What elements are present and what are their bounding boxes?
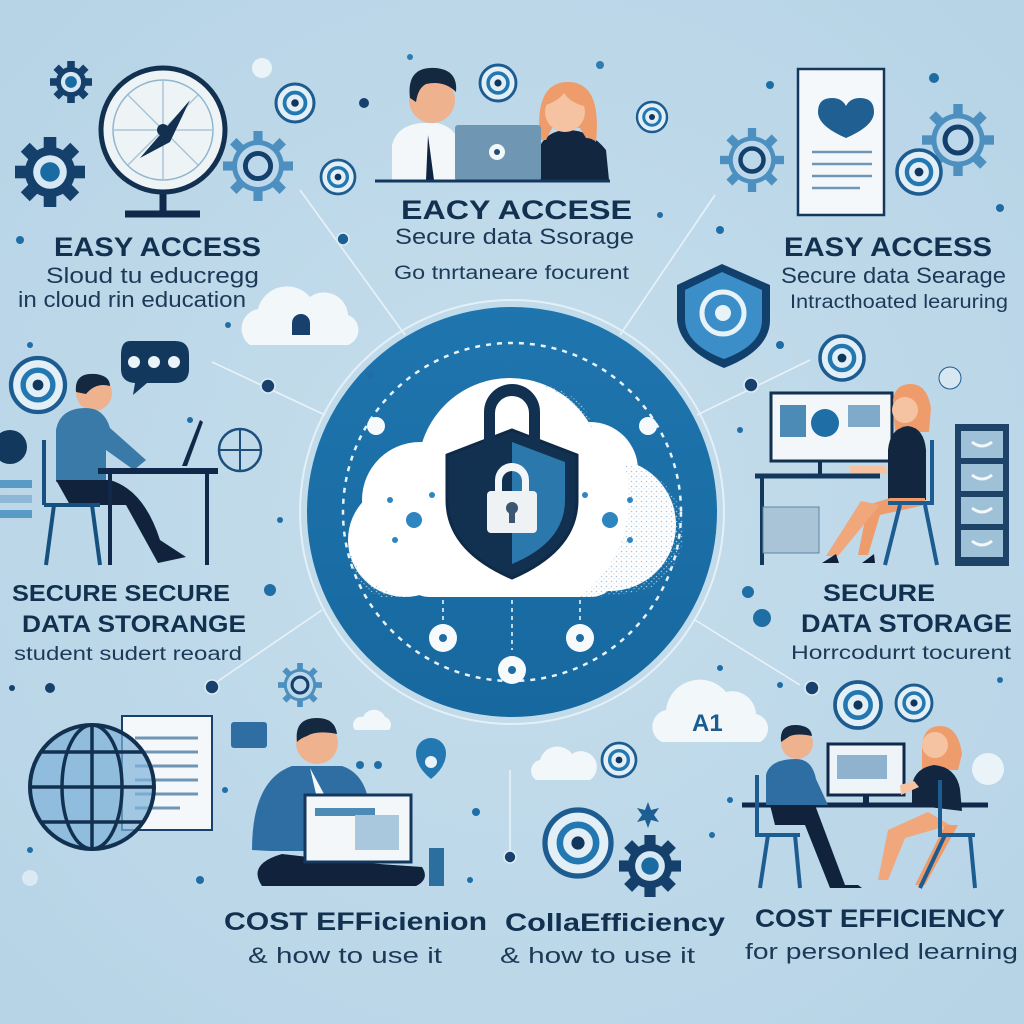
- text: secure data storage right: Horrcodurrt tocurent: [791, 643, 1012, 664]
- illustration: person sitting with laptop: [252, 718, 444, 886]
- text: secure data storage right: DATA STORAGE: [801, 610, 1012, 638]
- monitor: [828, 744, 904, 804]
- text: easy access centre: Secure data Ssorage: [395, 224, 634, 249]
- text: cost efficiency left: [224, 908, 487, 968]
- icon: small badges right: [776, 336, 961, 389]
- text: easy access left: [18, 232, 261, 312]
- icon: cloud with AI label: [652, 680, 768, 742]
- illustration: two people at desk right: [742, 682, 1004, 888]
- icons: top centre: [252, 54, 667, 132]
- text: secure data storage left: [12, 580, 246, 665]
- text: easy access centre: EACY ACCESE: [401, 195, 632, 225]
- text: easy access centre: [394, 195, 634, 284]
- cloud shading: [350, 381, 683, 597]
- text: collaboration efficiency centre: & how to use it: [500, 943, 695, 968]
- base line: [375, 180, 610, 182]
- icon: document top right: [798, 69, 884, 215]
- text: cost efficiency left: & how to use it: [248, 943, 442, 968]
- text: secure data storage right: SECURE: [823, 580, 935, 607]
- man: [757, 725, 862, 888]
- hub connector dots: [367, 417, 657, 684]
- text: cost efficiency right: [745, 905, 1018, 964]
- icon: clock with stand: [101, 68, 225, 214]
- woman: [878, 726, 975, 888]
- text: secure data storage right: [791, 580, 1012, 664]
- illustration: two people with laptop: [375, 68, 610, 181]
- text: easy access right: Intracthoated learuring: [790, 292, 1008, 313]
- speech bubble: [121, 341, 189, 395]
- text: cost efficiency right: COST EFFICIENCY: [755, 905, 1005, 933]
- icon: shield: [677, 264, 770, 368]
- desk and chair: [755, 440, 937, 565]
- icons above: [777, 682, 1004, 785]
- text: collaboration efficiency centre: [500, 909, 725, 968]
- decorative scattered icons: [16, 212, 1003, 884]
- text: collaboration efficiency centre: CollaEfficiency: [505, 909, 725, 937]
- illustration: woman at monitor right: [755, 384, 1009, 566]
- filing cabinet: [955, 424, 1009, 566]
- central hub: cloud security: [300, 300, 724, 724]
- text: secure data storage left: SECURE SECURE: [12, 580, 230, 606]
- text: easy access centre: Go tnrtaneare focurent: [394, 263, 630, 284]
- connector lines: [205, 190, 819, 863]
- monitor: [771, 393, 892, 476]
- illustration: person at laptop left: [0, 341, 261, 565]
- text: easy access right: Secure data Searage: [781, 263, 1006, 288]
- text: easy access left: Sloud tu educregg: [46, 263, 259, 288]
- figure: [822, 384, 931, 563]
- cloud: [348, 378, 676, 597]
- icon: cloud with AI label: A1: [692, 710, 723, 737]
- icons: top-left gears: [15, 61, 355, 207]
- text: secure data storage left: student sudert reoard: [14, 644, 242, 665]
- laptop and desk: [44, 420, 218, 565]
- man: [392, 68, 459, 180]
- icon: small cloud: [531, 747, 597, 780]
- icons: lower middle left: [9, 663, 636, 886]
- desk: [742, 802, 988, 808]
- icon: globe with document: [30, 716, 212, 849]
- hub disc: [300, 300, 724, 724]
- books and globe: [0, 429, 261, 518]
- text: secure data storage left: DATA STORANGE: [22, 611, 246, 638]
- badge: [11, 358, 65, 412]
- text: easy access right: [781, 232, 1008, 313]
- text: easy access left: EASY ACCESS: [54, 232, 261, 262]
- laptop: [455, 125, 541, 181]
- icon: cloud left: [242, 286, 358, 345]
- text: cost efficiency left: COST EFFicienion: [224, 908, 487, 936]
- equipment: [763, 507, 819, 553]
- text: cost efficiency right: for personled learning: [745, 939, 1018, 964]
- woman: [538, 82, 609, 180]
- text: easy access right: EASY ACCESS: [784, 232, 992, 262]
- icons: lower middle gears: [545, 802, 681, 897]
- icons: top right gears: [720, 73, 1004, 212]
- shield with lock: [447, 384, 577, 578]
- network nodes: [387, 492, 633, 543]
- text: easy access left: in cloud rin education: [18, 287, 246, 312]
- figure: [56, 374, 186, 563]
